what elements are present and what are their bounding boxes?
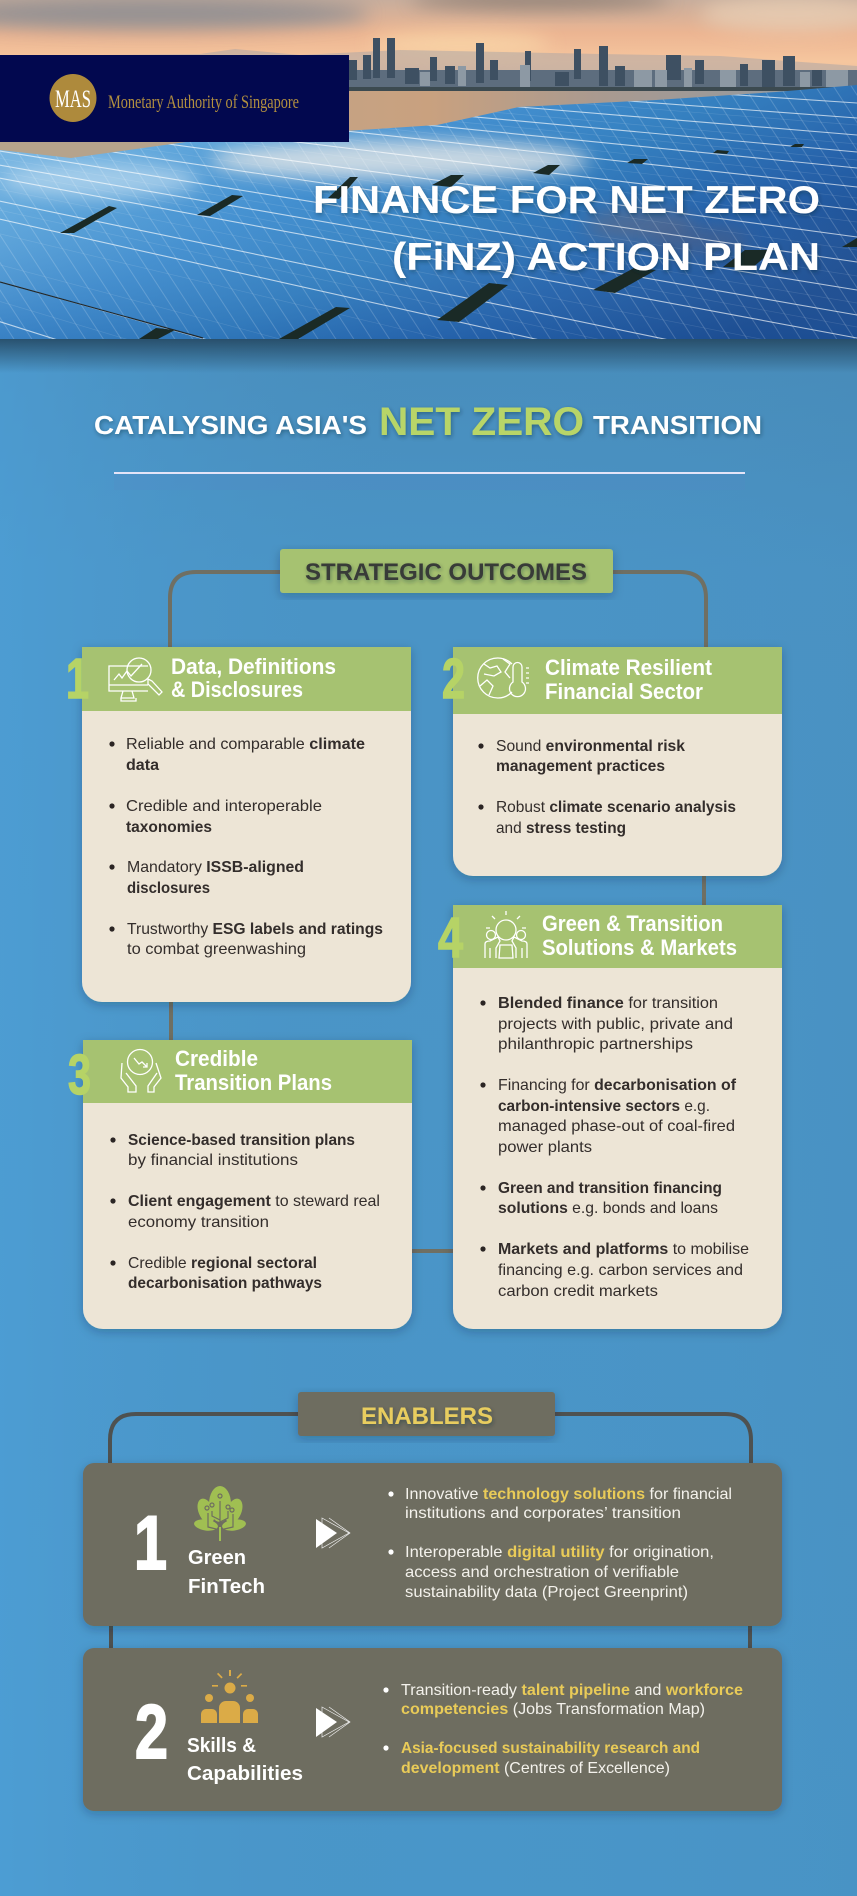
bullet list: projects with public, private and <box>498 1016 733 1033</box>
bullet list: solutions e.g. bonds and loans <box>498 1200 718 1217</box>
bullet list: taxonomies <box>126 819 212 836</box>
heading: & Disclosures <box>171 677 303 702</box>
title: (FiNZ) ACTION PLAN <box>392 236 820 279</box>
heading: enablers <box>298 1392 555 1436</box>
bullet list <box>383 1682 743 1777</box>
bullet list: Green and transition financing <box>498 1180 722 1197</box>
heading: Credible <box>175 1046 258 1071</box>
bullet list: Innovative technology solutions for financial <box>405 1486 732 1503</box>
number 2: 2 <box>135 1690 168 1775</box>
arrow <box>316 1518 350 1548</box>
label: FinTech <box>188 1576 265 1598</box>
bullet list: development (Centres of Excellence) <box>401 1760 670 1777</box>
bullet list: Transition-ready talent pipeline and workforce <box>401 1682 743 1699</box>
label: Capabilities <box>187 1763 303 1785</box>
heading: enablers: ENABLERS <box>361 1403 493 1430</box>
number 1: 1 <box>134 1501 167 1586</box>
connector frame: strategic outcomes <box>170 572 706 1251</box>
number 3: 3 <box>68 1043 91 1107</box>
panel: 3 credible transition plans <box>68 1040 412 1329</box>
panel: enabler 1 green fintech <box>83 1463 782 1626</box>
bullet list <box>109 736 383 958</box>
bullet list: disclosures <box>127 880 210 897</box>
title <box>313 179 820 279</box>
heading: Transition Plans <box>175 1070 332 1095</box>
bullet list <box>388 1486 732 1601</box>
arrow <box>316 1707 350 1737</box>
number 1: 1 <box>66 647 89 711</box>
bullet list: and stress testing <box>496 820 626 837</box>
bullet list: power plants <box>498 1139 592 1156</box>
bullet list: Markets and platforms to mobilise <box>498 1241 749 1258</box>
icon: monitor with magnifier <box>109 658 162 701</box>
bullet list: Credible regional sectoral <box>128 1255 317 1272</box>
heading <box>171 654 336 702</box>
label <box>187 1735 303 1785</box>
label: Green <box>188 1547 246 1569</box>
title: FINANCE FOR NET ZERO <box>313 179 820 222</box>
icon: people under sun <box>201 1670 258 1723</box>
heading: Green & Transition <box>542 911 723 936</box>
logo wordmark: Monetary Authority of Singapore <box>108 92 299 113</box>
heading: Climate Resilient <box>545 655 713 680</box>
icon: globe and thermometer <box>478 658 529 698</box>
connector frame: enablers <box>110 1414 751 1648</box>
bullet list: competencies (Jobs Transformation Map) <box>401 1701 705 1718</box>
bullet list: Robust climate scenario analysis <box>496 799 736 816</box>
logo roundel: MAS <box>55 86 91 113</box>
bullet list: carbon credit markets <box>498 1283 658 1300</box>
heading: strategic outcomes <box>280 549 613 593</box>
bullet list: financing e.g. carbon services and <box>498 1262 743 1279</box>
icon: hands holding dial <box>121 1050 161 1092</box>
heading: Solutions & Markets <box>542 935 737 960</box>
heading <box>542 911 737 960</box>
heading <box>175 1046 332 1095</box>
bullet list: data <box>126 757 159 774</box>
logo roundel <box>50 74 96 122</box>
icon: people with light bulb <box>485 911 527 958</box>
bullet list <box>480 995 749 1300</box>
bullet list: sustainability data (Project Greenprint) <box>405 1584 688 1601</box>
logo: Monetary Authority of Singapore <box>0 55 349 142</box>
bullet list: Financing for decarbonisation of <box>498 1077 737 1094</box>
bullet list <box>478 738 736 837</box>
panel: enabler 2 skills and capabilities <box>83 1648 782 1811</box>
number 2: 2 <box>442 647 465 711</box>
heading: Financial Sector <box>545 679 703 704</box>
hero photo: solar panels and city skyline <box>0 0 857 339</box>
bullet list: Interoperable digital utility for origination, <box>405 1544 714 1561</box>
bullet list: philanthropic partnerships <box>498 1036 693 1053</box>
bullet list: Client engagement to steward real <box>128 1193 380 1210</box>
bullet list: Blended finance for transition <box>498 995 718 1012</box>
number 4: 4 <box>438 906 463 970</box>
bullet list: Science-based transition plans <box>128 1132 355 1149</box>
bullet list: economy transition <box>128 1214 269 1231</box>
bullet list: management practices <box>496 758 665 775</box>
heading: strategic outcomes: STRATEGIC OUTCOMES <box>305 559 587 586</box>
panel: 2 climate resilient financial sector <box>442 647 782 876</box>
bullet list: managed phase-out of coal-fired <box>498 1118 735 1135</box>
label <box>188 1547 265 1598</box>
heading <box>545 655 713 704</box>
bullet list: Trustworthy ESG labels and ratings <box>127 921 383 938</box>
subtitle: Catalysing Asia's Net Zero transition: TRANSITION <box>593 410 762 440</box>
subtitle: Catalysing Asia's Net Zero transition: CATALYSING ASIA'S <box>94 410 367 440</box>
bullet list: to combat greenwashing <box>127 941 306 958</box>
bullet list: Reliable and comparable climate <box>126 736 365 753</box>
bullet list: carbon-intensive sectors e.g. <box>498 1098 710 1115</box>
bullet list: Credible and interoperable <box>126 798 322 815</box>
icon: circuit leaf <box>193 1486 247 1541</box>
subtitle: Catalysing Asia's Net Zero transition: NET ZERO <box>379 400 584 444</box>
bullet list: Asia-focused sustainability research and <box>401 1740 700 1757</box>
bullet list: access and orchestration of verifiable <box>405 1564 679 1581</box>
subtitle: Catalysing Asia's Net Zero transition <box>94 400 762 444</box>
bullet list <box>110 1132 380 1292</box>
bullet list: decarbonisation pathways <box>128 1275 322 1292</box>
bullet list: institutions and corporates’ transition <box>405 1505 681 1522</box>
heading: Data, Definitions <box>171 654 336 679</box>
bullet list: Mandatory ISSB-aligned <box>127 859 304 876</box>
bullet list: Sound environmental risk <box>496 738 685 755</box>
bullet list: by financial institutions <box>128 1152 298 1169</box>
label: Skills & <box>187 1735 256 1757</box>
panel: 4 green and transition solutions and markets <box>438 905 782 1329</box>
panel: 1 data, definitions and disclosures <box>66 647 411 1002</box>
divider <box>114 472 745 490</box>
